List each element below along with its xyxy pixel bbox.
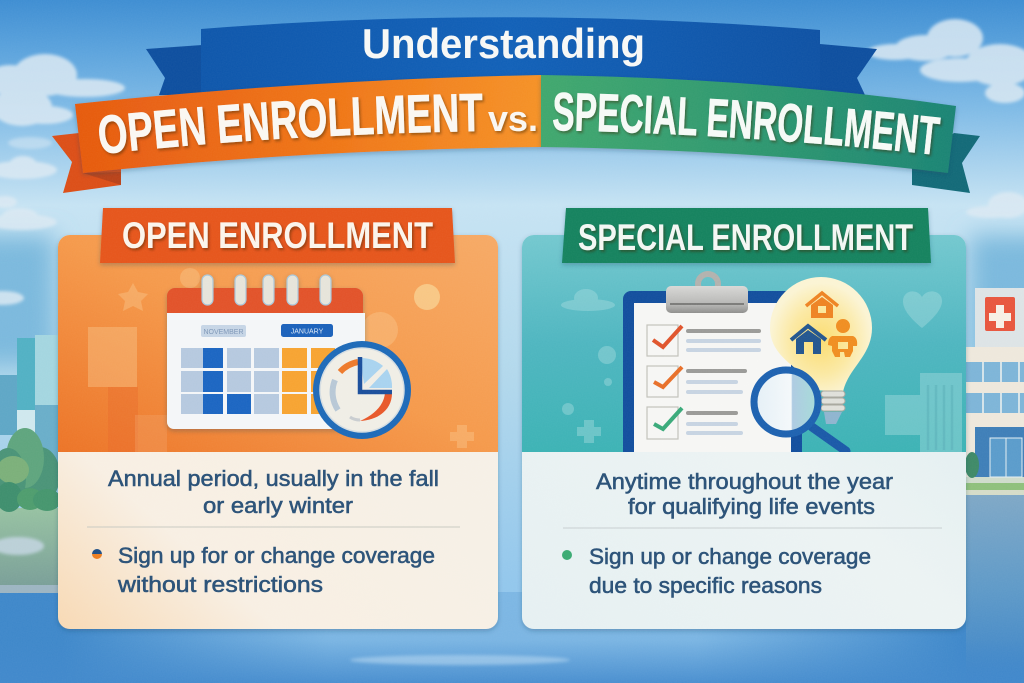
heading banner: special enrollment: SPECIAL ENROLLMENT bbox=[578, 217, 913, 258]
heading banner: open enrollment: OPEN ENROLLMENT bbox=[122, 215, 433, 256]
title ribbon bbox=[52, 17, 980, 193]
title: vs.: vs. bbox=[488, 98, 538, 139]
panel text: special enrollment timing: for qualifying life events bbox=[628, 494, 875, 519]
heading banner: open enrollment bbox=[100, 208, 455, 263]
checklist row 1 bbox=[647, 325, 761, 356]
heading banner: special enrollment bbox=[562, 208, 931, 263]
icon: clipboard checklist bbox=[623, 274, 802, 452]
panel text: open enrollment timing: Annual period, usually in the fall bbox=[108, 466, 439, 491]
checklist row 2 bbox=[647, 366, 747, 397]
icon: hospital cross bbox=[985, 297, 1015, 331]
ribbon tails bbox=[52, 44, 980, 193]
icon: orange house bbox=[806, 293, 838, 318]
trees bbox=[0, 428, 61, 512]
bullet: special enrollment bbox=[562, 544, 871, 598]
month labels bbox=[201, 324, 333, 337]
panel text: open enrollment timing bbox=[108, 466, 439, 518]
panel text: special enrollment timing bbox=[596, 469, 893, 519]
panel text: special enrollment timing: Anytime throughout the year bbox=[596, 469, 893, 494]
calendar grid bbox=[181, 348, 335, 414]
panel: special enrollment bbox=[522, 235, 966, 629]
month labels: NOVEMBER bbox=[203, 329, 244, 336]
bullet: open enrollment bbox=[92, 543, 435, 597]
icon: calendar bbox=[167, 275, 365, 429]
checklist row 3 bbox=[647, 407, 743, 439]
panel illustration: checklist scene bbox=[522, 235, 966, 452]
clouds bbox=[0, 19, 1024, 305]
panel text: open enrollment timing: or early winter bbox=[203, 493, 353, 518]
month labels: JANUARY bbox=[291, 328, 324, 336]
right hospital scene bbox=[965, 288, 1024, 495]
icon: light bulb with homes and family bbox=[770, 277, 872, 424]
title: special enrollment: SPECIAL ENROLLMENT bbox=[553, 92, 944, 158]
icon: blue house bbox=[791, 326, 826, 354]
calendar rings bbox=[202, 275, 331, 305]
bullet: open enrollment: without restrictions bbox=[117, 572, 323, 597]
icon: magnifying glass bbox=[754, 370, 846, 451]
title line 1: Understanding bbox=[362, 20, 645, 67]
blue upper ribbon bbox=[201, 17, 820, 100]
icon: person bbox=[828, 319, 857, 357]
bullet: special enrollment: due to specific reasons bbox=[589, 573, 822, 598]
orange ribbon bbox=[75, 75, 541, 173]
icon: clock bbox=[313, 341, 411, 439]
clipboard clip bbox=[666, 274, 748, 313]
bullet: special enrollment: Sign up or change coverage bbox=[589, 544, 871, 569]
title: open enrollment: OPEN ENROLLMENT bbox=[99, 94, 486, 157]
bullet: open enrollment: Sign up for or change coverage bbox=[118, 543, 435, 568]
panel illustration: calendar scene bbox=[58, 235, 498, 452]
green ribbon bbox=[541, 75, 956, 173]
left city scene bbox=[0, 335, 61, 593]
panel: open enrollment bbox=[58, 235, 498, 629]
